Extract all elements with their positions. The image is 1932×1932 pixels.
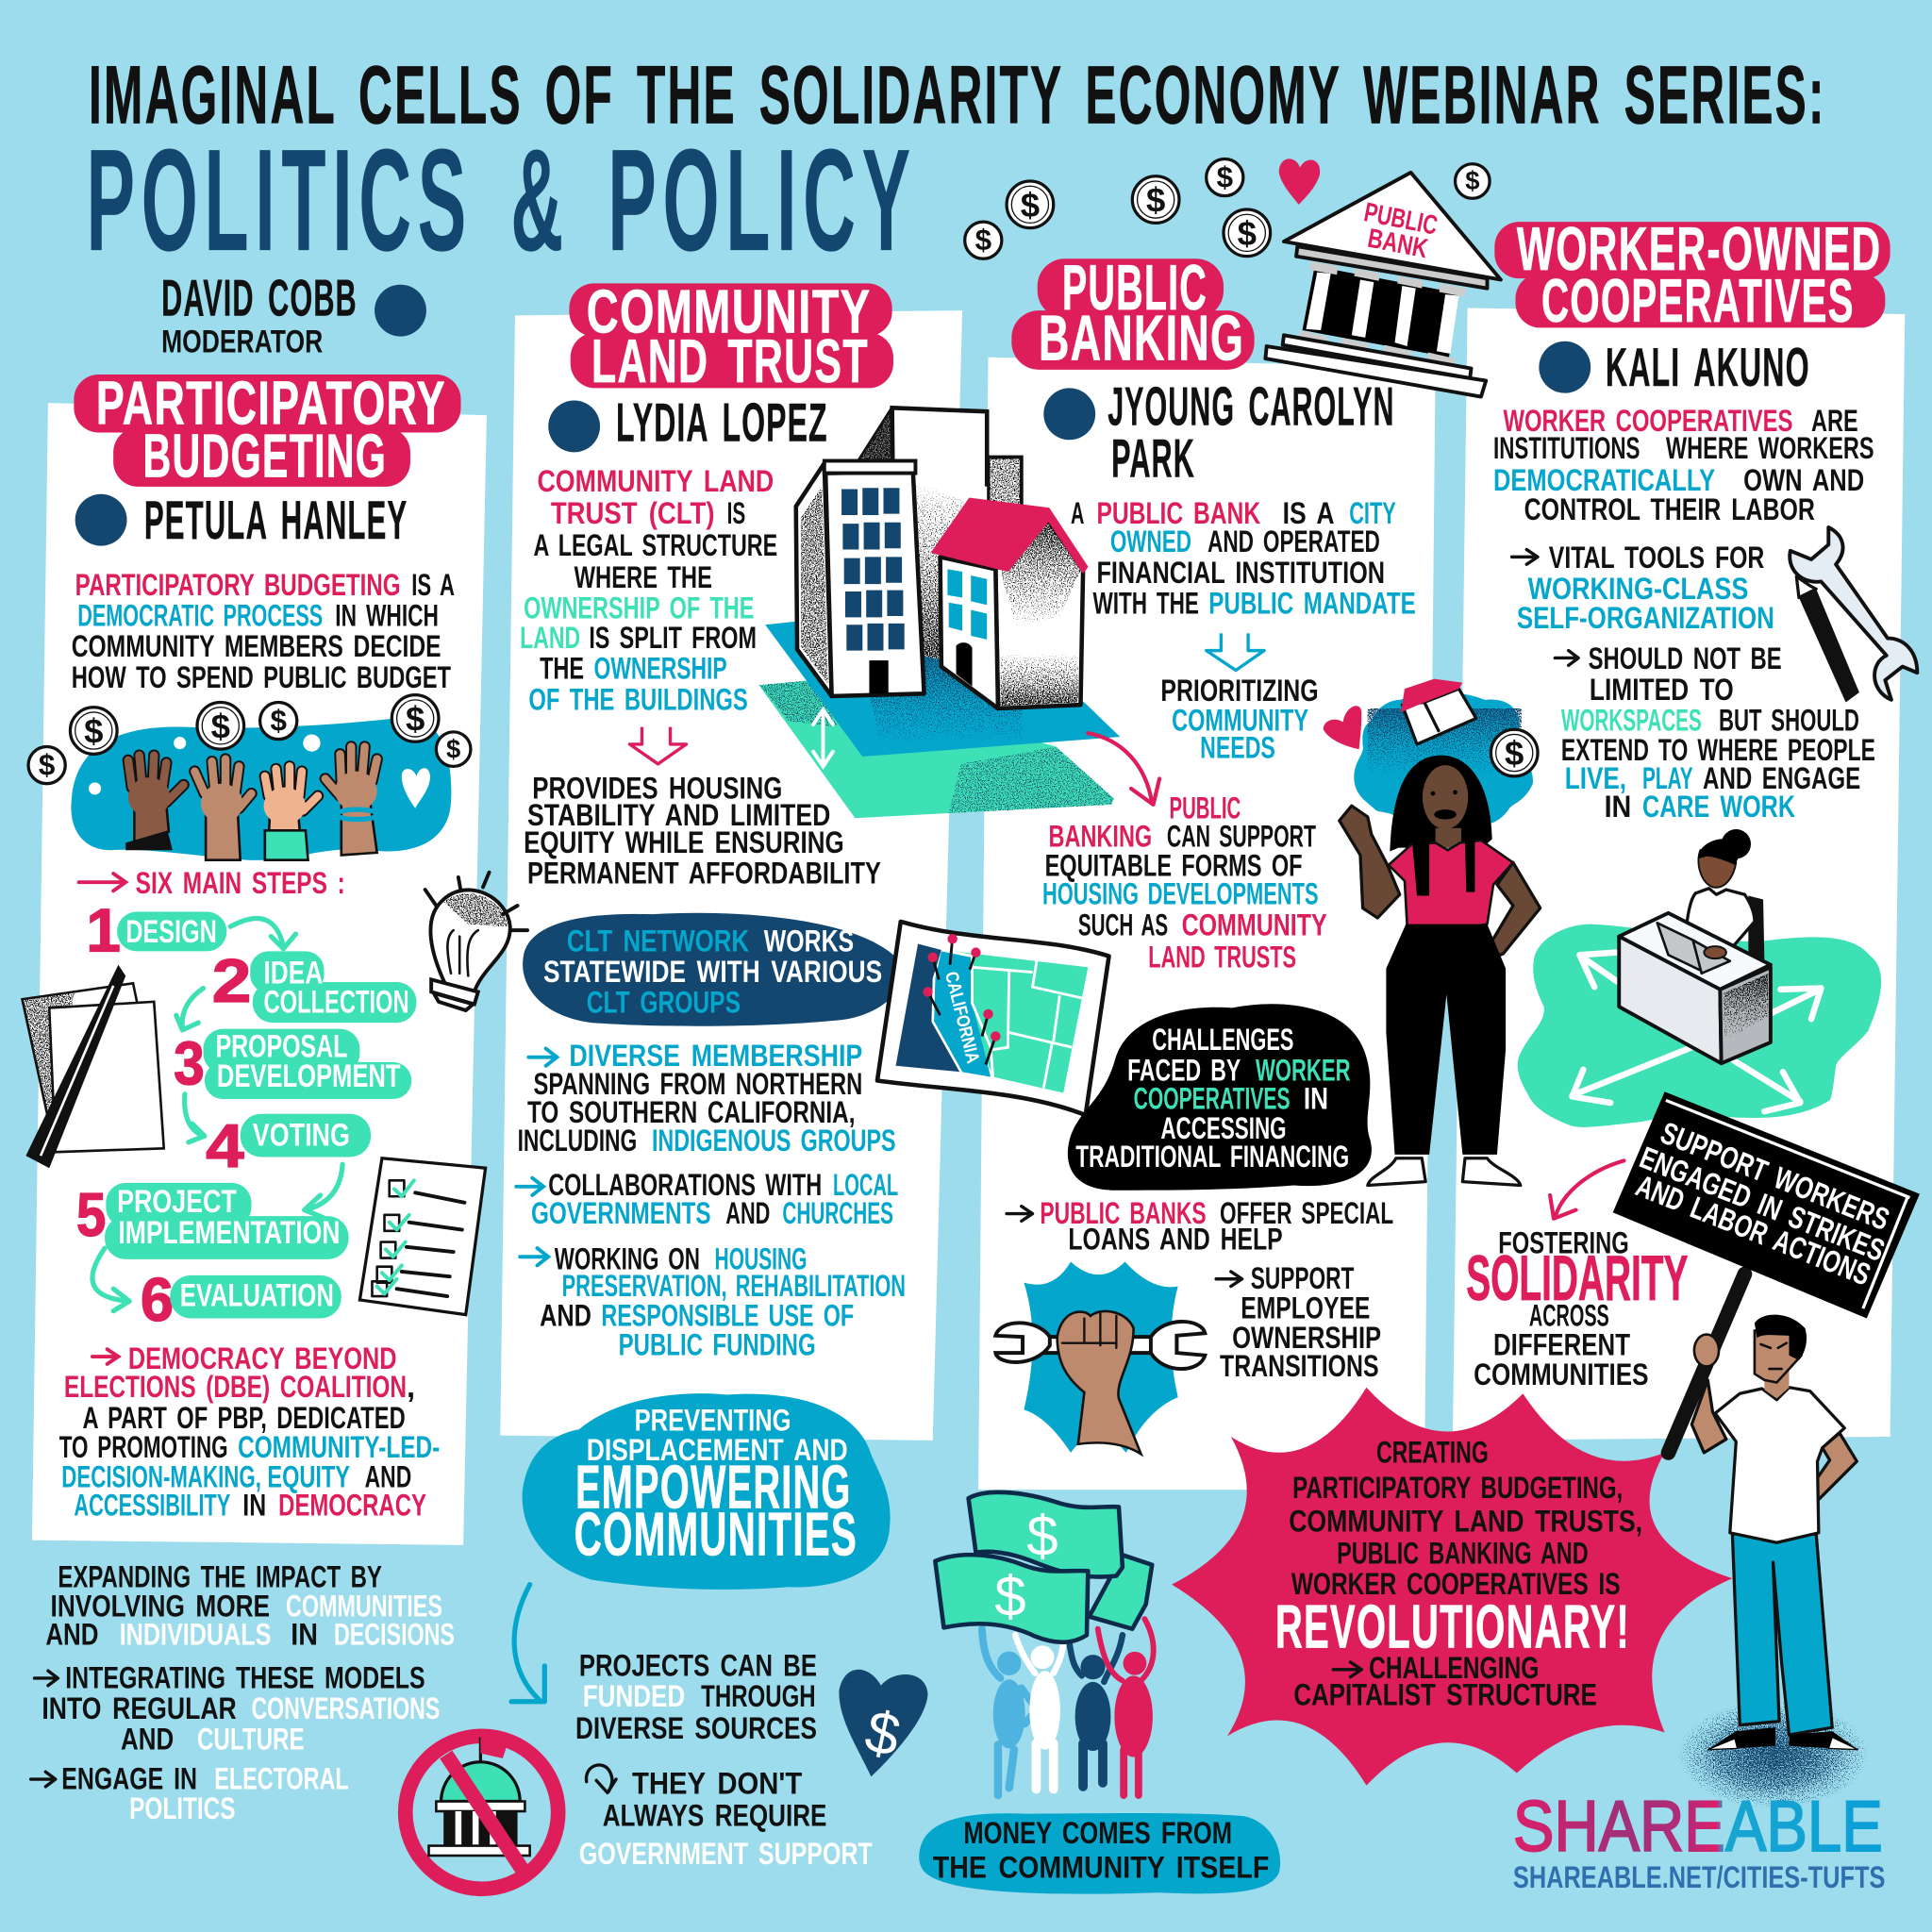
text: definition of CLT: LAND [520, 620, 580, 655]
heading: public banking [1011, 253, 1255, 374]
text: democracy beyond elections: DEMOCRACY [278, 1488, 426, 1523]
arrow: teal curved down [511, 1585, 544, 1702]
text: projects can be funded: DIVERSE SOURCES [575, 1710, 817, 1745]
illustration: money held up by people [935, 1492, 1154, 1795]
icon: pink heart [1324, 706, 1361, 749]
text: democracy beyond elections: ACCESSIBILITY [74, 1488, 230, 1523]
text: expanding the impact: AND [45, 1617, 98, 1652]
step 3 proposal development: PROPOSAL [216, 1029, 347, 1065]
illustration: raised hands and coins: $ [39, 749, 55, 782]
callout: revolutionary starburst: PARTICIPATORY BUDGETING, [1292, 1470, 1623, 1505]
text: support employee ownership: EMPLOYEE [1241, 1291, 1370, 1325]
callout: revolutionary starburst: PUBLIC BANKING AND [1337, 1535, 1589, 1570]
sign [1613, 1091, 1920, 1319]
speaker: Lydia Lopez [548, 393, 828, 454]
callout: preventing displacement: DISPLACEMENT AND [587, 1432, 848, 1467]
arrow: white double arrow on land [813, 709, 833, 766]
speaker: Petula Hanley [75, 491, 408, 551]
icon: checklist [359, 1158, 486, 1315]
callout: revolutionary starburst: REVOLUTIONARY! [1275, 1591, 1630, 1660]
text: projects can be funded: PROJECTS CAN BE [579, 1647, 817, 1682]
text: public banks offer loans: PUBLIC BANKS [1040, 1195, 1207, 1230]
text: working on housing: HOUSING [715, 1241, 808, 1275]
text: definition of worker cooperatives [1493, 403, 1874, 526]
text: definition of participatory budgeting: HOW TO SPEND PUBLIC BUDGET [72, 659, 451, 694]
icon: no government building [406, 1736, 558, 1889]
step 3 proposal development: DEVELOPMENT [217, 1058, 401, 1094]
callout: money comes from community: THE COMMUNITY ITSELF [933, 1850, 1269, 1885]
text: definition of public bank: PUBLIC MANDATE [1208, 585, 1416, 620]
text: working on housing: PRESERVATION, [562, 1268, 727, 1303]
text: public banking can support: CAN SUPPORT [1167, 818, 1316, 853]
callout: revolutionary starburst: CHALLENGING [1369, 1650, 1539, 1685]
arrow: pink curved [1088, 733, 1159, 805]
text: diverse membership: INCLUDING [518, 1123, 637, 1158]
heading: worker-owned cooperatives [1494, 214, 1890, 335]
text: definition of CLT: OF THE BUILDINGS [528, 681, 748, 716]
text: definition of CLT: WHERE THE [575, 559, 712, 594]
callout: CLT network: STATEWIDE WITH VARIOUS [543, 954, 882, 989]
heading: community land trust: COMMUNITY [587, 277, 871, 346]
text: definition of worker cooperatives: WORKER COOPERATIVES [1503, 403, 1792, 438]
step 4 voting: 4 [206, 1111, 244, 1180]
text: should not be limited: IN [1605, 789, 1631, 824]
text: support employee ownership [1216, 1260, 1381, 1383]
callout: revolutionary starburst: WORKER COOPERATIVES IS [1291, 1566, 1621, 1601]
text: working on housing: PUBLIC FUNDING [619, 1327, 816, 1362]
text: public banking can support: EQUITABLE FORMS OF [1045, 848, 1303, 883]
text: prioritizing community needs: NEEDS [1200, 729, 1275, 764]
text: expanding the impact: AND [121, 1722, 174, 1757]
coins above the bank: $ [1021, 186, 1040, 225]
text: diverse membership: TO SOUTHERN CALIFORNIA, [527, 1094, 855, 1129]
step 6 evaluation: EVALUATION [180, 1277, 334, 1313]
panel: community land trust content [516, 277, 906, 1362]
icon: California map [877, 922, 1109, 1115]
banknotes: $ [994, 1564, 1026, 1627]
text: expanding the impact: INTO REGULAR [42, 1690, 237, 1725]
text: should not be limited: SHOULD NOT BE [1589, 641, 1782, 675]
crowd silhouettes [982, 1619, 1154, 1795]
speaker: Petula Hanley: PETULA HANLEY [144, 491, 408, 551]
callout: challenges: IN [1304, 1081, 1328, 1116]
callout: money comes from community: MONEY COMES FROM [963, 1815, 1232, 1850]
back buildings [858, 409, 894, 462]
text: collaborations: LOCAL [833, 1167, 898, 1202]
text: should not be limited: BUT SHOULD [1719, 703, 1859, 738]
text: definition of worker cooperatives: OWN AND [1743, 462, 1864, 497]
text: projects can be funded [575, 1647, 873, 1871]
text: provides housing: PERMANENT AFFORDABILITY [527, 855, 881, 890]
callout: preventing displacement: EMPOWERING [575, 1453, 852, 1522]
text: definition of CLT: IS SPLIT FROM [589, 620, 757, 655]
callout: revolutionary starburst: CAPITALIST STRUCTURE [1293, 1677, 1597, 1712]
step 5 project implementation: PROJECT [117, 1184, 237, 1220]
coins above the bank: $ [1146, 181, 1165, 220]
pole [1668, 1274, 1744, 1453]
text: democracy beyond elections: ELECTIONS (DBE) COALITION [64, 1369, 407, 1404]
logo: Shareable: SHAREABLE [1513, 1787, 1883, 1867]
text: definition of public bank: PUBLIC BANK [1096, 495, 1260, 530]
illustration: public bank building: PUBLIC [1361, 197, 1440, 242]
speaker: Jyoung Carolyn Park: PARK [1111, 428, 1195, 489]
text: working on housing: REHABILITATION [736, 1268, 906, 1303]
callout: challenges: CHALLENGES [1152, 1022, 1293, 1057]
text: democracy beyond elections: EQUITY [267, 1458, 350, 1493]
text: public banking can support: HOUSING DEVELOPMENTS [1042, 876, 1319, 911]
ground shadow [1677, 1700, 1869, 1808]
text: expanding the impact: POLITICS [129, 1790, 235, 1825]
text: fostering solidarity [1466, 1224, 1688, 1391]
text: working on housing: AND [540, 1297, 591, 1332]
text: definition of worker cooperatives: ARE [1811, 403, 1858, 438]
text: support employee ownership: OWNERSHIP [1232, 1320, 1381, 1355]
text: diverse membership: SPANNING FROM NORTHERN [534, 1066, 862, 1101]
text: expanding the impact: ENGAGE IN [61, 1760, 197, 1795]
icon: navy heart with dollar [839, 1670, 928, 1776]
coins above the bank: $ [975, 224, 991, 257]
text: definition of worker cooperatives: DEMOCRATICALLY [1493, 462, 1715, 497]
text: prioritizing community needs [1160, 673, 1319, 764]
text: prioritizing community needs: PRIORITIZING [1160, 673, 1319, 708]
text: public banks offer loans [1007, 1195, 1393, 1256]
panel: community land trust background [500, 310, 962, 1441]
icon: fist with wrench [995, 1261, 1205, 1454]
callout: challenges [1068, 1004, 1372, 1191]
text: expanding the impact: INTEGRATING THESE MODELS [65, 1659, 425, 1694]
house [995, 520, 1083, 708]
illustration: raised hands and coins [28, 695, 471, 860]
teal land plane [765, 616, 1120, 757]
text: expanding the impact: CONVERSATIONS [251, 1690, 440, 1725]
text: should not be limited: PLAY [1642, 760, 1693, 795]
callout: challenges: WORKER [1256, 1052, 1351, 1087]
text: public banking can support: BANKING [1049, 818, 1152, 853]
text: support employee ownership: SUPPORT [1251, 1260, 1354, 1295]
step 4 voting: VOTING [253, 1118, 350, 1154]
text: provides housing: PROVIDES HOUSING [532, 770, 782, 805]
text: definition of participatory budgeting: PARTICIPATORY BUDGETING [75, 567, 400, 602]
text: definition of public bank: OWNED [1110, 524, 1191, 558]
text: definition of CLT: OWNERSHIP [594, 651, 727, 686]
text: expanding the impact [31, 1558, 455, 1825]
speaker: Lydia Lopez: LYDIA LOPEZ [616, 393, 828, 454]
text: should not be limited: AND ENGAGE [1703, 760, 1860, 795]
person [1691, 1315, 1858, 1750]
text: definition of participatory budgeting: IS A [411, 567, 455, 602]
heading: participatory budgeting: PARTICIPATORY [96, 368, 446, 437]
callout: CLT network: CLT NETWORK [567, 923, 749, 958]
text: democracy beyond elections: DECISION-MAKING, [61, 1458, 261, 1493]
icon: navy heart with dollar: $ [859, 1698, 906, 1770]
callout: challenges: TRADITIONAL FINANCING [1075, 1139, 1349, 1174]
step 1 design: 1 [86, 895, 121, 964]
text: fostering solidarity: DIFFERENT [1493, 1327, 1630, 1362]
text: definition of CLT: A LEGAL STRUCTURE [534, 527, 777, 562]
text: working on housing [520, 1241, 906, 1362]
text: fostering solidarity: COMMUNITIES [1474, 1357, 1649, 1391]
step 2 idea collection: 2 [212, 946, 251, 1015]
tall building [796, 463, 832, 696]
coins above the bank: $ [1465, 166, 1479, 195]
text: definition of CLT: OWNERSHIP OF THE [524, 591, 754, 625]
text: democracy beyond elections: TO PROMOTING [59, 1429, 228, 1464]
text: fostering solidarity: FOSTERING [1498, 1224, 1629, 1259]
text: democracy beyond elections: , [407, 1369, 415, 1404]
callout: CLT network: CLT GROUPS [587, 985, 741, 1020]
text: expanding the impact: EXPANDING THE IMPACT BY [58, 1558, 382, 1593]
text: expanding the impact: COMMUNITIES [286, 1589, 442, 1624]
text: definition of public bank: FINANCIAL INSTITUTION [1096, 555, 1385, 590]
text: democracy beyond elections: A PART OF PBP, DEDICATED [83, 1400, 406, 1435]
text: democracy beyond elections: AND [365, 1458, 411, 1493]
banknotes [935, 1492, 1152, 1642]
step 5 project implementation: IMPLEMENTATION [118, 1215, 340, 1251]
moderator: DAVID COBB [161, 268, 358, 326]
step 4 voting [206, 1111, 371, 1180]
callout: money comes from community [919, 1813, 1280, 1894]
text: support employee ownership: TRANSITIONS [1220, 1348, 1379, 1383]
step 6 evaluation: 6 [141, 1265, 174, 1334]
text: definition of CLT [520, 463, 777, 716]
text: public banking can support: COMMUNITY [1182, 907, 1327, 941]
step 2 idea collection: IDEA [264, 955, 323, 991]
step 2 idea collection [212, 946, 416, 1023]
callout: CLT network [523, 913, 901, 1026]
text: definition of CLT: THE [540, 651, 584, 686]
text: definition of participatory budgeting: DEMOCRATIC PROCESS [77, 598, 323, 633]
text: definition of public bank: WITH THE [1093, 585, 1199, 620]
text: vital tools: WORKING-CLASS [1528, 571, 1748, 606]
subtitle: POLITICS & POLICY [86, 118, 917, 281]
callout: challenges: ACCESSING [1160, 1110, 1287, 1145]
text: expanding the impact: CULTURE [197, 1722, 305, 1757]
text: should not be limited: LIMITED TO [1590, 672, 1734, 707]
text: collaborations: GOVERNMENTS [531, 1195, 711, 1230]
text: expanding the impact: INVOLVING MORE [51, 1589, 270, 1624]
panel: participatory budgeting background [32, 403, 487, 1545]
text: projects can be funded: FUNDED [583, 1678, 685, 1713]
heading: participatory budgeting: BUDGETING [143, 421, 387, 490]
illustration: house cloud: $ [1505, 734, 1524, 773]
icon: heart above bank [1279, 158, 1320, 205]
text: prioritizing community needs: COMMUNITY [1172, 703, 1308, 738]
step 3 proposal development: 3 [174, 1028, 205, 1097]
illustration: public bank building: BANK [1365, 224, 1430, 264]
text: projects can be funded: THEY DON'T [632, 1766, 802, 1801]
text: provides housing: EQUITY WHILE ENSURING [524, 824, 844, 859]
panel: worker-owned cooperatives content [1466, 214, 1917, 1391]
step 5 project implementation [76, 1180, 349, 1259]
coins above the bank: $ [1217, 161, 1233, 194]
text: public banks offer loans: OFFER SPECIAL [1220, 1195, 1393, 1230]
text: collaborations [516, 1167, 898, 1230]
text: democracy beyond elections: DEMOCRACY BEYOND [128, 1341, 397, 1375]
step 1 design [86, 895, 226, 964]
text: vital tools: VITAL TOOLS FOR [1549, 540, 1764, 575]
text: definition of participatory budgeting: IN WHICH [335, 598, 439, 633]
heading: participatory budgeting [74, 368, 460, 490]
panel: public banking content [995, 253, 1416, 1454]
text: definition of CLT: TRUST (CLT) [551, 495, 715, 530]
text: definition of worker cooperatives: INSTITUTIONS [1493, 430, 1640, 465]
text: vital tools [1512, 540, 1774, 635]
moderator: MODERATOR [161, 325, 323, 360]
icon: wrench and pen [1790, 527, 1917, 702]
speaker: Jyoung Carolyn Park: JYOUNG CAROLYN [1108, 377, 1395, 438]
illustration: house cloud [1354, 679, 1538, 823]
text: definition of public bank: AND OPERATED [1208, 524, 1380, 558]
speaker: Jyoung Carolyn Park [1043, 377, 1395, 489]
callout: preventing displacement: COMMUNITIES [575, 1499, 858, 1568]
text: provides housing [524, 770, 881, 890]
text: definition of participatory budgeting [72, 567, 455, 694]
illustration: raised hands and coins: $ [406, 700, 425, 739]
text: expanding the impact: IN [291, 1617, 318, 1652]
text: definition of worker cooperatives: CONTROL THEIR LABOR [1524, 491, 1815, 526]
text: working on housing: RESPONSIBLE USE OF [601, 1297, 854, 1332]
illustration: green blob with arrows and worker at desk [1518, 829, 1881, 1127]
text: projects can be funded: GOVERNMENT SUPPORT [579, 1836, 873, 1871]
text: projects can be funded: THROUGH [701, 1678, 816, 1713]
text: diverse membership [518, 1038, 896, 1158]
heading: six main steps [79, 865, 345, 900]
text: definition of public bank: IS A [1283, 495, 1335, 530]
arrow: pink to solidarity [1550, 1160, 1624, 1219]
callout: preventing displacement [523, 1393, 891, 1590]
heading: community land trust [569, 277, 893, 395]
arrow: down pink [629, 727, 687, 764]
step 1 design: DESIGN [125, 914, 217, 950]
text: collaborations: AND [725, 1195, 770, 1230]
illustration: speaker woman [1340, 756, 1541, 1185]
text: collaborations: COLLABORATIONS WITH [548, 1167, 822, 1202]
text: definition of public bank: CITY [1349, 495, 1396, 530]
illustration: raised hands and coins: $ [84, 712, 103, 751]
heading: community land trust: LAND TRUST [591, 326, 869, 395]
text: expanding the impact: INDIVIDUALS [120, 1617, 271, 1652]
illustration: raised hands and coins: $ [211, 707, 230, 745]
step 6 evaluation [141, 1265, 341, 1334]
panel: participatory budgeting content [23, 368, 527, 1523]
text: definition of CLT: COMMUNITY LAND [537, 463, 774, 498]
panel: worker-owned cooperatives background [1453, 308, 1905, 1441]
arrow: down teal [1207, 633, 1264, 671]
text: democracy beyond elections: IN [242, 1488, 266, 1523]
text: public banking can support: SUCH AS [1078, 907, 1168, 941]
flow: six steps [76, 895, 416, 1334]
callout: revolutionary starburst: CREATING [1376, 1434, 1489, 1469]
green land plane [759, 680, 1114, 818]
arrows between steps [92, 918, 342, 1311]
illustration: buildings on land [759, 408, 1120, 818]
callout: revolutionary starburst: COMMUNITY LAND TRUSTS, [1289, 1504, 1642, 1539]
text: projects can be funded: ALWAYS REQUIRE [603, 1798, 826, 1833]
text: public banking can support: LAND TRUSTS [1148, 939, 1296, 974]
text: democracy beyond elections: COMMUNITY-LED- [238, 1429, 440, 1464]
callout: CLT network: WORKS [764, 923, 854, 958]
step 3 proposal development [174, 1028, 411, 1099]
coins above the bank [965, 158, 1490, 258]
text: vital tools: SELF-ORGANIZATION [1517, 600, 1774, 635]
heading: public banking: PUBLIC [1062, 253, 1208, 324]
text: public banking can support [1042, 790, 1327, 974]
text: should not be limited: CARE WORK [1642, 789, 1795, 824]
text: definition of CLT: IS [727, 495, 745, 530]
text: public banking can support: PUBLIC [1170, 790, 1241, 824]
panel: public banking background [978, 358, 1436, 1490]
text: diverse membership: DIVERSE MEMBERSHIP [569, 1038, 862, 1073]
illustration: protester with sign [1613, 1091, 1920, 1808]
callout: preventing displacement: PREVENTING [635, 1402, 791, 1437]
illustration: public bank building [1265, 173, 1501, 397]
text: collaborations: CHURCHES [782, 1195, 893, 1230]
callout: challenges: FACED BY [1127, 1052, 1241, 1087]
text: definition of public bank: A [1071, 495, 1084, 530]
text: public banks offer loans: LOANS AND HELP [1068, 1221, 1283, 1256]
text: fostering solidarity: SOLIDARITY [1466, 1243, 1688, 1314]
heading: six main steps: SIX MAIN STEPS : [136, 865, 345, 900]
text: democracy beyond elections [59, 1341, 440, 1523]
text: definition of public bank [1071, 495, 1416, 620]
map label: CALIFORNIA [941, 970, 983, 1065]
illustration: raised hands and coins: $ [270, 705, 287, 738]
text: provides housing: STABILITY AND LIMITED [527, 797, 830, 832]
text: should not be limited [1555, 641, 1875, 824]
text: working on housing: WORKING ON [555, 1241, 700, 1275]
text: expanding the impact: DECISIONS [334, 1617, 455, 1652]
callout: revolutionary starburst [1172, 1388, 1732, 1786]
coins above the bank: $ [1238, 214, 1257, 253]
step 5 project implementation: 5 [76, 1180, 106, 1249]
icon: paper and pencil [23, 965, 164, 1168]
banknotes: $ [1026, 1504, 1058, 1567]
icon: light bulb [425, 873, 527, 1010]
heading: public banking: BANKING [1039, 303, 1244, 374]
logo: Shareable [1513, 1787, 1885, 1894]
callout: challenges: COOPERATIVES [1134, 1081, 1291, 1116]
moderator [161, 268, 426, 360]
text: fostering solidarity: ACROSS [1529, 1297, 1609, 1332]
illustration: raised hands and coins: $ [446, 734, 460, 763]
text: definition of participatory budgeting: COMMUNITY MEMBERS DECIDE [72, 628, 441, 663]
text: expanding the impact: ELECTORAL [214, 1760, 349, 1795]
text: should not be limited: WORKSPACES [1561, 703, 1702, 738]
text: should not be limited: LIVE, [1565, 760, 1626, 795]
speaker: Kali Akuno [1539, 338, 1810, 398]
text: diverse membership: INDIGENOUS GROUPS [652, 1123, 896, 1158]
step 2 idea collection: COLLECTION [264, 985, 409, 1021]
